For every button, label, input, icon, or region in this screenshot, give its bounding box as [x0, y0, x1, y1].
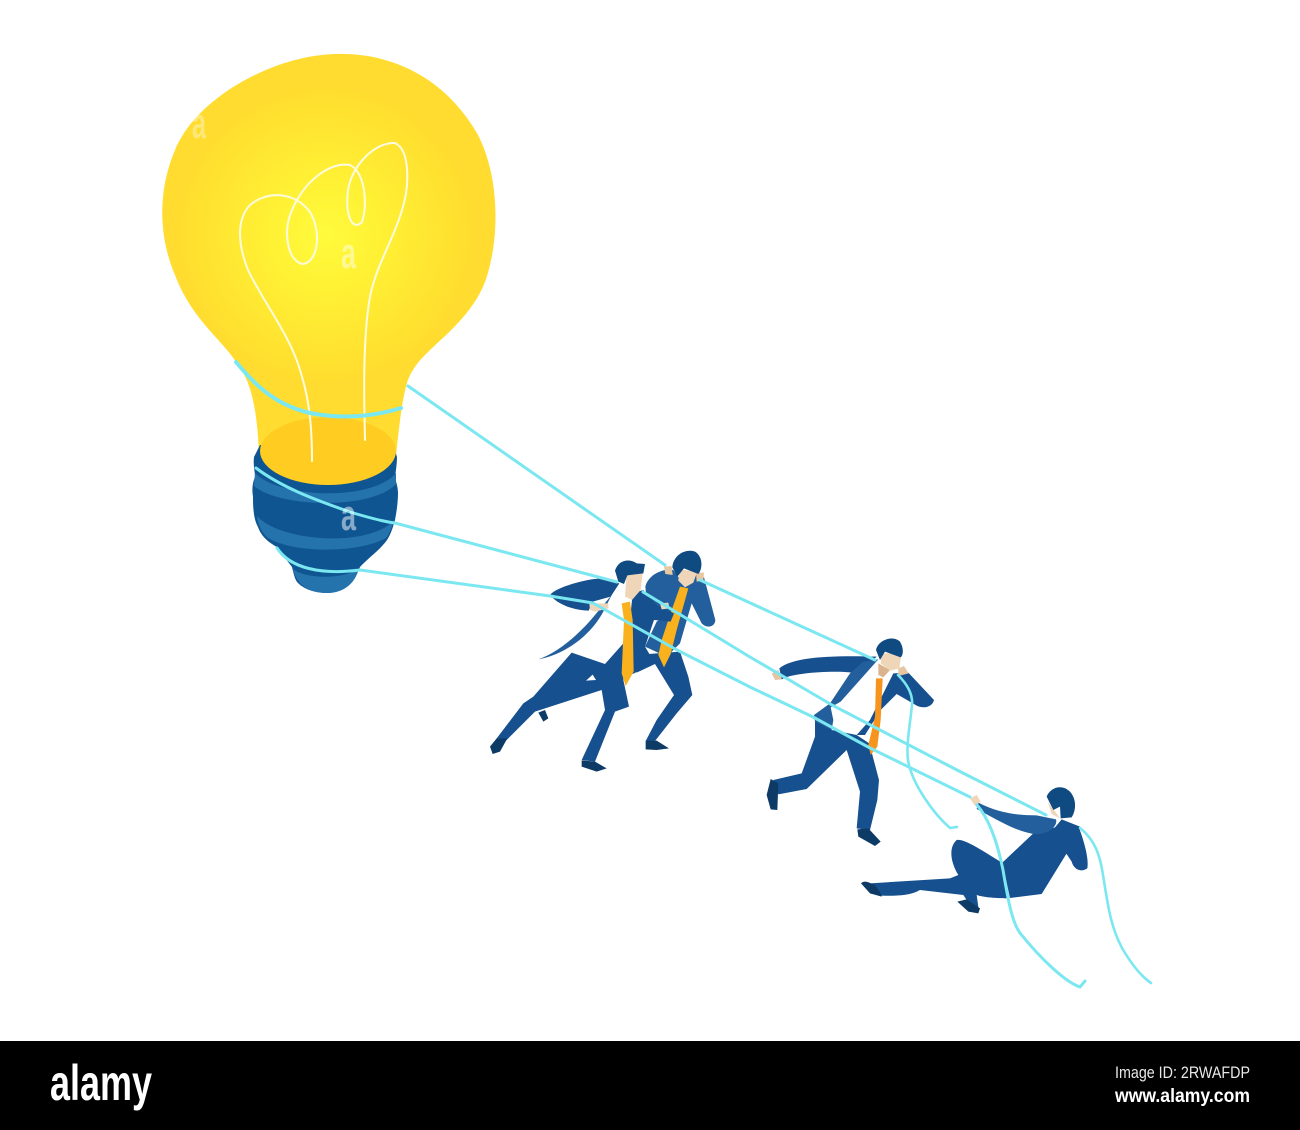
- neck: [878, 663, 890, 677]
- jacket: [645, 570, 715, 657]
- sleeve: [550, 579, 619, 611]
- torso: [1002, 819, 1080, 898]
- watermark letters: [192, 99, 356, 540]
- filament: [240, 143, 407, 461]
- face: [625, 573, 643, 600]
- shoes: [767, 779, 881, 846]
- bulb inner neck: [260, 417, 396, 485]
- hands: [589, 603, 669, 612]
- trousers: [637, 652, 692, 741]
- face: [678, 569, 697, 587]
- loose end: man 4 right: [1080, 828, 1151, 983]
- loose end: man 4 left: [977, 805, 1085, 987]
- face: [1048, 802, 1060, 818]
- hands: [772, 666, 909, 680]
- man 1 (front): [490, 560, 674, 772]
- man 2 (behind): [637, 551, 715, 750]
- face: [881, 653, 902, 671]
- trousers: [773, 718, 879, 830]
- shoes: [490, 710, 607, 772]
- tie: [868, 678, 883, 755]
- hands: [664, 566, 704, 582]
- jacket: [814, 659, 878, 730]
- rope: base to man 4: [256, 468, 1046, 815]
- man 4 (sitting): [861, 787, 1088, 913]
- watermark letters: a: [192, 99, 206, 148]
- shoes: [861, 882, 980, 913]
- hair: [1047, 787, 1075, 818]
- website: www.alamy.com: [1114, 1086, 1250, 1107]
- screw base: [252, 445, 398, 593]
- rope: bulb neck to man 3: [236, 362, 401, 417]
- jacket front: [623, 590, 674, 674]
- front arm: [977, 803, 1056, 834]
- ropes: [236, 362, 1151, 987]
- trousers: [497, 643, 629, 762]
- alamy logo: alamy: [50, 1055, 152, 1111]
- back arm: [1065, 826, 1088, 870]
- hair: [615, 560, 645, 584]
- footer bar: [0, 1041, 1300, 1130]
- image id: Image ID: 2RWAFDP: [1115, 1063, 1250, 1082]
- man 3 (running): [767, 638, 934, 846]
- tie: [658, 587, 688, 667]
- jacket tail: [538, 595, 612, 659]
- loose end: man 3: [898, 675, 957, 828]
- watermark letters: a: [341, 229, 356, 278]
- hair: [876, 638, 903, 660]
- light bulb: [162, 54, 495, 593]
- rope: lower base to man 4: [277, 548, 970, 797]
- sleeve: [779, 656, 877, 679]
- bulb glass: [162, 54, 495, 455]
- watermark letters: a: [341, 491, 356, 540]
- legs: [870, 840, 1009, 912]
- tie: [622, 602, 634, 686]
- hair: [672, 551, 701, 577]
- hand: [970, 795, 981, 806]
